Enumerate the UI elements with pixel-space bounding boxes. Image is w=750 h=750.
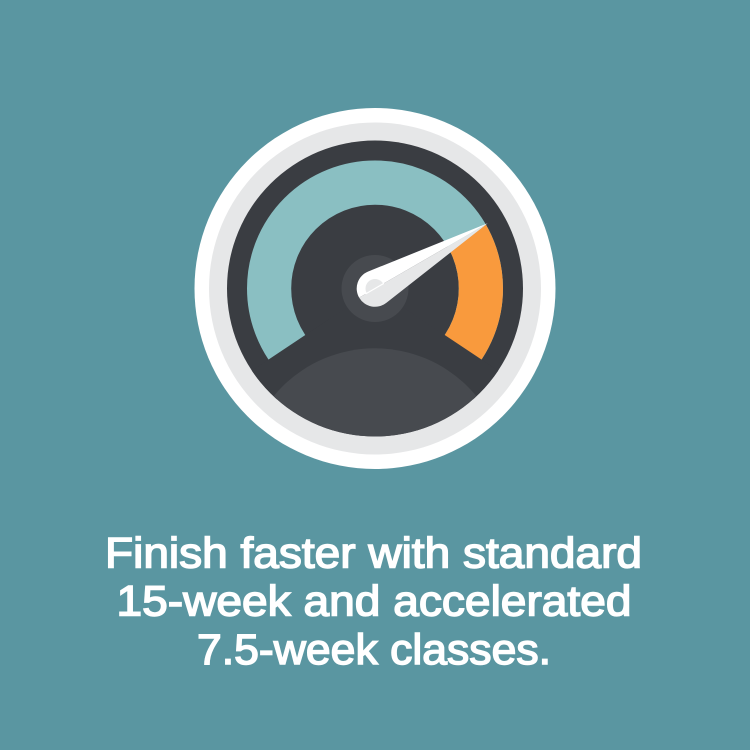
- caption: [105, 530, 642, 674]
- caption line 2: 15-week and accelerated: [116, 578, 632, 626]
- needle pivot: [366, 279, 384, 298]
- icon: speedometer gauge: [194, 108, 556, 469]
- lower wedge of dark face: [252, 335, 498, 400]
- needle hub: [342, 255, 408, 322]
- orange arc segment: [444, 224, 503, 360]
- needle pivot highlight: [366, 283, 384, 294]
- teal arc segment: [269, 183, 481, 394]
- needle upper half: [357, 223, 488, 298]
- needle lower half: [359, 223, 488, 307]
- gauge dark face: [227, 140, 523, 436]
- caption line 1: Finish faster with standard: [105, 530, 642, 578]
- needle: [357, 223, 488, 307]
- gauge grey ring: [209, 122, 541, 454]
- gauge outer white ring: [194, 108, 556, 469]
- lower dashboard dome: [274, 348, 476, 436]
- caption line 3: 7.5-week classes.: [197, 626, 551, 674]
